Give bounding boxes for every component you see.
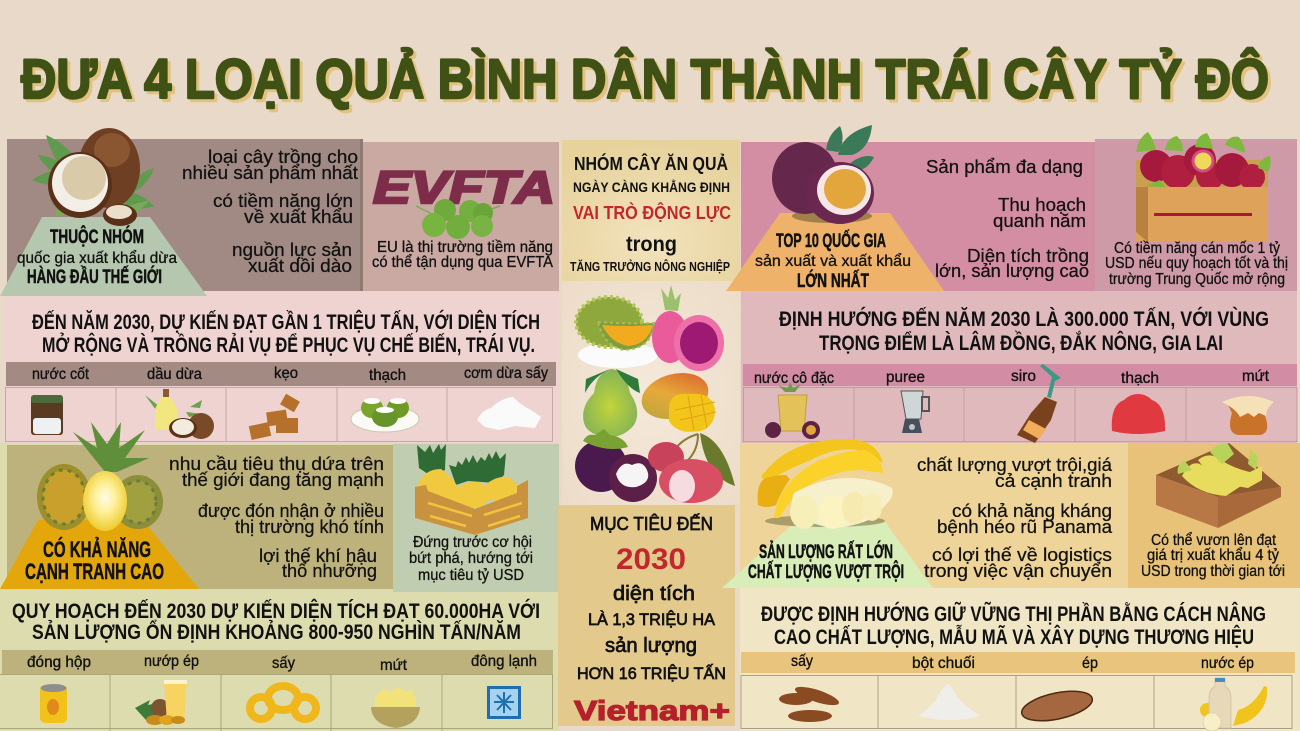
- icon: coconut: [32, 128, 154, 226]
- banana heading: [761, 602, 1266, 649]
- icon: canned coconut milk: [31, 395, 63, 435]
- icon: banana juice: [1200, 678, 1267, 731]
- coconut product table: thạch: [369, 367, 406, 384]
- passion fruit product table: mứt: [1242, 368, 1270, 385]
- banana benefits text: [917, 455, 1113, 581]
- coconut product table: dầu dừa: [147, 366, 202, 383]
- passion fruit product table: puree: [886, 369, 925, 386]
- pineapple benefits text: thổ nhưỡng: [282, 561, 377, 581]
- icon: dried banana: [779, 683, 841, 722]
- passion fruit crate note: Có tiềm năng cán mốc 1 tỷ: [1114, 240, 1280, 257]
- coconut benefits text: xuất dồi dào: [248, 256, 352, 276]
- coconut benefits text: về xuất khẩu: [244, 207, 353, 227]
- icon: dragon fruit: [652, 285, 724, 371]
- icon: pineapple: [37, 422, 163, 531]
- icon: passion fruit concentrate: [765, 382, 820, 439]
- centre top text: NHÓM CÂY ĂN QUẢ: [574, 153, 728, 174]
- banana product table: [741, 652, 1295, 731]
- panel: banana section: [722, 439, 1300, 731]
- pineapple pyramid text: CÓ KHẢ NĂNG: [43, 537, 151, 562]
- centre top text: TĂNG TRƯỞNG NÔNG NGHIỆP: [570, 259, 730, 274]
- pineapple crate note: [409, 534, 533, 584]
- icon: dried pineapple rings: [250, 686, 316, 719]
- icon: mango: [636, 366, 716, 432]
- centre bottom text: HƠN 16 TRIỆU TẤN: [577, 664, 726, 683]
- icon: coconut jelly: [351, 398, 419, 432]
- coconut pyramid text: THUỘC NHÓM: [50, 226, 144, 248]
- centre top text: trong: [626, 233, 677, 256]
- icon: pressed banana: [1019, 686, 1095, 726]
- centre top text: VAI TRÒ ĐỘNG LỰC: [573, 202, 731, 223]
- coconut product table: cơm dừa sấy: [464, 365, 548, 382]
- banana crate note: [1141, 532, 1285, 580]
- centre bottom text: sản lượng: [605, 635, 697, 657]
- pineapple product table: [0, 650, 553, 731]
- passion fruit pyramid text: TOP 10 QUỐC GIA: [776, 230, 886, 252]
- banana product table: nước ép: [1201, 655, 1254, 672]
- pineapple product table: mứt: [380, 657, 408, 674]
- icon: pineapple crate: [415, 444, 528, 535]
- icon: coconut oil: [145, 389, 214, 439]
- icon: banana crate: [1156, 443, 1281, 528]
- pineapple pyramid text: [25, 537, 164, 584]
- icon: dried coconut flakes: [477, 397, 541, 430]
- pineapple heading: [12, 599, 540, 644]
- pineapple crate note: Đứng trước cơ hội: [413, 534, 532, 551]
- passion fruit product table: [743, 364, 1297, 443]
- banana product table: ép: [1082, 655, 1098, 672]
- pineapple benefits text: thế giới đang tăng mạnh: [182, 470, 384, 490]
- coconut pyramid text: quốc gia xuất khẩu dừa: [17, 250, 177, 267]
- EVFTA note: [372, 239, 554, 271]
- passion fruit benefits text: quanh năm: [993, 211, 1086, 231]
- banana pyramid text: CHẤT LƯỢNG VƯỢT TRỘI: [748, 561, 904, 583]
- EVFTA logo: EVFTA: [373, 162, 555, 213]
- EVFTA note: có thể tận dụng qua EVFTA: [372, 254, 554, 271]
- passion fruit product table: siro: [1011, 368, 1036, 385]
- icon: red jelly: [1112, 394, 1165, 434]
- icon: banana: [758, 439, 893, 529]
- banana pyramid base: [722, 522, 933, 588]
- icon: pineapple jam: [371, 687, 420, 728]
- centre top text: [570, 153, 731, 274]
- passion fruit pyramid text: [755, 230, 911, 292]
- icon: frozen pineapple: [487, 686, 521, 719]
- centre bottom text: diện tích: [613, 583, 695, 605]
- pineapple product table: nướp ép: [144, 653, 199, 670]
- passion fruit benefits text: Thu hoạch: [998, 195, 1086, 215]
- icon: passion fruit jam: [1222, 396, 1274, 435]
- passion fruit benefits text: Sản phẩm đa dạng: [926, 157, 1083, 177]
- passion fruit pyramid text: LỚN NHẤT: [797, 270, 869, 292]
- pineapple crate note: bứt phá, hướng tới: [409, 550, 533, 567]
- coconut benefits text: loại cây trồng cho: [208, 147, 358, 167]
- centre bottom text: [577, 513, 726, 683]
- passion fruit product table: nước cô đặc: [754, 370, 834, 387]
- pineapple product table: đông lạnh: [471, 653, 537, 670]
- icon: passion fruit crate: [1136, 132, 1271, 242]
- icon: coconut candy: [249, 394, 300, 440]
- banana crate note: giá trị xuất khẩu 4 tỷ: [1147, 547, 1279, 564]
- passion fruit pyramid text: sản xuất và xuất khẩu: [755, 253, 911, 270]
- coconut pyramid text: [17, 226, 177, 288]
- EVFTA note: EU là thị trường tiềm năng: [377, 239, 553, 256]
- passion fruit crate note: trường Trung Quốc mở rộng: [1109, 271, 1285, 288]
- centre bottom text: 2030: [616, 543, 686, 576]
- centre bottom text: LÀ 1,3 TRIỆU HA: [588, 610, 715, 629]
- coconut heading: [32, 310, 540, 357]
- icon: green coconuts: [416, 199, 500, 239]
- banana product table: sấy: [791, 653, 813, 670]
- centre bottom text: MỤC TIÊU ĐẾN: [590, 513, 713, 534]
- pineapple product table: sấy: [272, 655, 295, 672]
- banana benefits text: trong việc vận chuyển: [924, 561, 1112, 581]
- pineapple pyramid text: CẠNH TRANH CAO: [25, 559, 164, 584]
- coconut heading: ĐẾN NĂM 2030, DỰ KIẾN ĐẠT GẦN 1 TRIỆU TẤN, VỚI DIỆN TÍCH: [32, 310, 540, 334]
- icon: mangosteen: [575, 429, 657, 502]
- passion fruit heading: [779, 307, 1269, 355]
- logo: Vietnam+: Vietnam+: [574, 695, 730, 726]
- banana pyramid text: SẢN LƯỢNG RẤT LỚN: [759, 541, 893, 563]
- coconut benefits text: [182, 147, 358, 276]
- banana product table: bột chuối: [912, 655, 975, 672]
- icon: durian: [576, 297, 658, 368]
- pineapple crate note: mục tiêu tỷ USD: [418, 567, 524, 584]
- pineapple heading: QUY HOẠCH ĐẾN 2030 DỰ KIẾN DIỆN TÍCH ĐẠT 60.000HA VỚI: [12, 599, 540, 623]
- passion fruit product table: thạch: [1121, 370, 1159, 387]
- coconut product table: nước cốt: [32, 366, 90, 383]
- passion fruit pyramid base: [726, 213, 944, 291]
- coconut product table: kẹo: [274, 365, 298, 382]
- passion fruit benefits text: [926, 157, 1089, 281]
- banana benefits text: bệnh héo rũ Panama: [937, 517, 1113, 537]
- coconut benefits text: nhiều sản phẩm nhất: [182, 163, 358, 183]
- passion fruit benefits text: lớn, sản lượng cao: [935, 261, 1089, 281]
- pineapple heading: SẢN LƯỢNG ỔN ĐỊNH KHOẢNG 800-950 NGHÌN TẤN/NĂM: [32, 620, 521, 644]
- icon: lychee: [648, 433, 735, 503]
- pineapple benefits text: [169, 454, 384, 581]
- pineapple pyramid base: [0, 520, 199, 589]
- icon: pomelo: [583, 369, 640, 437]
- passion fruit crate note: [1105, 240, 1288, 288]
- pineapple product table: đóng hộp: [27, 654, 91, 671]
- banana benefits text: chất lượng vượt trội,giá: [917, 455, 1113, 475]
- banana pyramid text: [748, 541, 904, 583]
- coconut pyramid base: [0, 217, 207, 296]
- icon: canned pineapple: [40, 684, 67, 723]
- pineapple benefits text: được đón nhận ở nhiều: [198, 501, 384, 521]
- pineapple benefits text: thị trường khó tính: [235, 517, 384, 537]
- icon: syrup bottle: [1017, 364, 1061, 443]
- icon: blender: [901, 391, 929, 433]
- coconut heading: MỞ RỘNG VÀ TRỒNG RẢI VỤ ĐỂ PHỤC VỤ CHẾ BIẾN, TRÁI VỤ.: [42, 333, 535, 357]
- pineapple benefits text: nhu cầu tiêu thụ dứa trên: [169, 454, 384, 474]
- coconut benefits text: nguồn lực sản: [232, 240, 352, 260]
- coconut benefits text: có tiềm năng lớn: [213, 191, 353, 211]
- pineapple benefits text: lợi thế khí hậu: [259, 546, 377, 566]
- banana crate note: Có thể vươn lên đạt: [1151, 532, 1277, 549]
- icon: banana powder: [918, 684, 980, 720]
- icon: passion fruit: [772, 125, 874, 224]
- banana benefits text: có lợi thế về logistics: [932, 545, 1112, 565]
- centre top text: NGÀY CÀNG KHẲNG ĐỊNH: [573, 178, 730, 195]
- panel: centre column: [558, 140, 740, 726]
- passion fruit benefits text: Diện tích trồng: [967, 246, 1089, 266]
- banana benefits text: có khả năng kháng: [952, 501, 1112, 521]
- panel: passion fruit section: [722, 125, 1300, 731]
- coconut product table: [6, 362, 556, 442]
- icon: pineapple juice: [135, 680, 187, 725]
- banana benefits text: cả cạnh tranh: [995, 471, 1112, 491]
- banana crate note: USD trong thời gian tới: [1141, 563, 1285, 580]
- coconut pyramid text: HÀNG ĐẦU THẾ GIỚI: [27, 266, 162, 288]
